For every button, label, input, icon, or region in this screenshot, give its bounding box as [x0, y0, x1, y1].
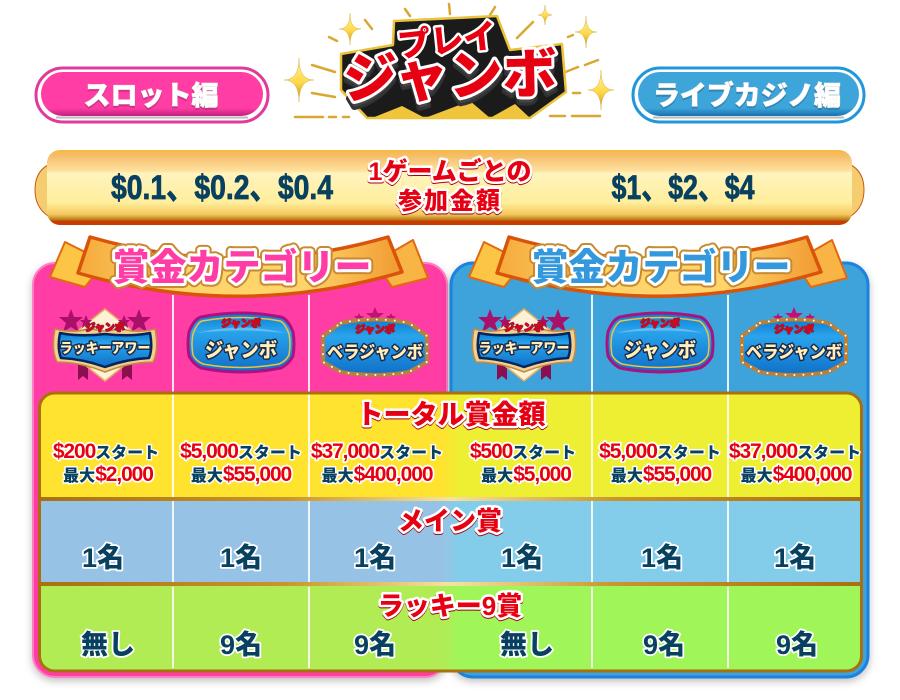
row backgrounds [40, 394, 861, 499]
banner: live casino: 賞金カテゴリー [532, 246, 790, 288]
total prize: slots column 2: 最大$55,000 [191, 463, 292, 486]
main prize counts: 1名 [501, 543, 543, 573]
total prize: slots column 3: $37,000スタート [311, 440, 443, 463]
main prize counts: 1名 [774, 543, 816, 573]
banner: live casino [469, 237, 847, 296]
heading: トータル賞金額: トータル賞金額 [356, 400, 546, 430]
total prize: live column 1 [470, 440, 576, 486]
bar heading line 2: 参加金額 [398, 188, 502, 215]
main prize counts: 1名 [354, 543, 396, 573]
bar heading: 1ゲームごとの [369, 157, 531, 186]
table: prizes [38, 393, 863, 671]
slot bet amounts: $0.1、$0.2、$0.4 [111, 169, 333, 207]
total prize: live column 3: $37,000スタート [729, 440, 861, 463]
total prize: live column 3: 最大$400,000 [741, 463, 852, 486]
banner: slots [50, 237, 428, 296]
plei text: プレイ [396, 17, 498, 64]
total prize: slots column 2: $5,000スタート [180, 440, 302, 463]
icon: sparkles [284, 5, 614, 110]
badge: ジャンボ (slots): ジャンボ [205, 339, 277, 362]
lucky 9 prize counts: 無し [81, 630, 135, 660]
badge: ベラジャンボ (slots): ジャンボ [355, 323, 395, 336]
logo: プレイジャンボ [284, 4, 614, 118]
button: ライブカジノ編: ライブカジノ編 [653, 80, 841, 111]
main prize counts [82, 543, 816, 573]
logo black extrusion: ジャンボ [343, 50, 558, 116]
badge: ラッキーアワー (live casino): ラッキーアワー [478, 340, 570, 356]
jumbo text: ジャンボ [343, 44, 557, 110]
badge: ベラジャンボ (live casino): ベラジャンボ [746, 343, 842, 362]
total prize: slots column 1: 最大$2,000 [63, 463, 153, 486]
lucky 9 prize counts: 9名 [643, 630, 685, 660]
badge: ベラジャンボ (live casino) [742, 307, 846, 375]
badge: ベラジャンボ (slots): ベラジャンボ [327, 343, 423, 362]
badge: ジャンボ (live casino): ジャンボ [640, 317, 680, 330]
heading: メイン賞: メイン賞 [398, 506, 502, 536]
badge: ベラジャンボ (live casino): ジャンボ [774, 323, 814, 336]
total prize: live column 3 [729, 440, 861, 486]
main prize counts: 1名 [82, 543, 124, 573]
total prize: live column 1: $500スタート [470, 440, 576, 463]
lucky 9 prize counts [81, 630, 818, 660]
live casino bet amounts: $1、$2、$4 [612, 169, 755, 207]
total prize: slots column 3 [311, 440, 443, 486]
panel: slots [33, 263, 447, 677]
gold base [372, 101, 530, 118]
button: スロット編 [36, 68, 268, 122]
total prize: live column 2: $5,000スタート [599, 440, 721, 463]
heading: ラッキー9賞: ラッキー9賞 [378, 591, 522, 621]
main prize counts: 1名 [641, 543, 683, 573]
badge: ジャンボ (live casino): ジャンボ [624, 339, 696, 362]
panel: live casino [451, 263, 868, 677]
banner: live casino: 賞金カテゴリー [532, 246, 790, 288]
table frame [40, 393, 862, 671]
bar body [47, 150, 852, 225]
lucky 9 prize counts: 9名 [776, 630, 818, 660]
total prize: slots column 2 [180, 440, 302, 486]
row dividers [38, 499, 863, 584]
badge: ラッキーアワー (slots) [53, 309, 157, 381]
total prize: live column 2: 最大$55,000 [611, 463, 712, 486]
button: ライブカジノ編 [633, 68, 864, 122]
panel: bet amount bar [35, 150, 864, 225]
banner: slots: 賞金カテゴリー [112, 246, 372, 288]
badge: ジャンボ (live casino) [607, 313, 713, 372]
lucky 9 prize counts: 無し [500, 630, 554, 660]
badge: ベラジャンボ (slots) [323, 307, 427, 375]
lucky 9 prize counts: 9名 [354, 630, 396, 660]
rays [295, 4, 600, 117]
total prize: slots column 1 [53, 440, 159, 486]
total prize: live column 2 [599, 440, 721, 486]
badge: ジャンボ (slots) [188, 313, 294, 372]
total prize: slots column 3: 最大$400,000 [322, 463, 433, 486]
banner: slots: 賞金カテゴリー [112, 246, 372, 288]
total prize: live column 1: 最大$5,000 [481, 463, 571, 486]
badge: ラッキーアワー (live casino): ジャンボ [504, 321, 544, 334]
badge: ラッキーアワー (slots): ジャンボ [85, 321, 125, 334]
badge: ラッキーアワー (slots): ラッキーアワー [60, 340, 150, 356]
total prize: slots column 1: $200スタート [53, 440, 159, 463]
lucky 9 prize counts: 9名 [220, 630, 262, 660]
badge: ラッキーアワー (live casino) [472, 309, 576, 381]
main prize counts: 1名 [220, 543, 262, 573]
button: スロット編: スロット編 [84, 81, 218, 111]
badge: ジャンボ (slots): ジャンボ [221, 317, 261, 330]
logo plate [341, 16, 566, 118]
bar end caps [35, 165, 864, 216]
